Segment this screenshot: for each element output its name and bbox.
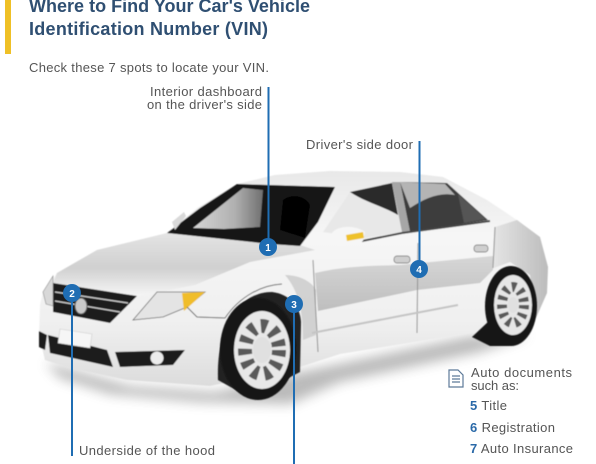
callout 4: driver's side door: [306, 137, 428, 278]
rear window light: [400, 182, 455, 208]
hood: [53, 233, 315, 296]
side intake: [39, 331, 47, 350]
callout 1: interior dashboard: 1: [265, 243, 271, 254]
intro text: Check these 7 spots to locate your VIN.: [29, 60, 269, 75]
bumper crease: [187, 284, 282, 318]
headlight amber: [182, 292, 205, 311]
lower intake: [48, 335, 113, 367]
far side mirror: [172, 212, 186, 230]
body silhouette: [39, 171, 548, 386]
window pillar: [392, 182, 410, 232]
front window dark reflection: [350, 183, 398, 215]
side mirror: [331, 227, 365, 245]
fender shading: [285, 275, 316, 340]
ground shadow: [45, 335, 530, 404]
title: [29, 0, 310, 39]
car illustration: [39, 171, 548, 404]
document item 7: 7 Auto Insurance: [470, 441, 573, 456]
accent bar: [5, 0, 11, 54]
callout 4: driver's side door: Driver's side door: [306, 137, 414, 152]
rear quarter glass: [458, 194, 486, 223]
door seams: [312, 227, 495, 352]
car body: [39, 171, 548, 386]
far headlight: [43, 276, 53, 306]
auto documents list: Auto documents: [471, 365, 572, 380]
document item 5: 5 Title: [470, 398, 507, 413]
document item 6: 6 Registration: [470, 420, 555, 435]
front wheel arch shade: [218, 292, 301, 398]
badge: [75, 298, 87, 314]
auto documents list: [470, 365, 573, 456]
callout 4: driver's side door: 4: [416, 265, 422, 276]
callout 2: underside of the hood: [63, 284, 215, 458]
grille chrome bars: [55, 292, 128, 312]
callout 3: line to bottom: [285, 295, 303, 464]
headlight: [133, 292, 205, 320]
callout 1: interior dashboard: on the driver's side: [147, 97, 262, 112]
auto documents list: such as:: [471, 378, 519, 393]
front wheel: [220, 298, 296, 400]
windshield reflection: [193, 188, 263, 229]
title: Identification Number (VIN): [29, 19, 268, 39]
icon: document: [449, 370, 463, 387]
license plate: [58, 329, 92, 348]
mirror indicator: [346, 232, 364, 241]
callout 1: interior dashboard: [147, 84, 277, 256]
fog lamp housing: [115, 350, 185, 367]
grey door band: [315, 256, 493, 311]
fog lamp: [150, 352, 164, 364]
front side window: [323, 182, 402, 238]
callout 2: underside of the hood: 2: [69, 289, 75, 300]
windshield: [167, 184, 335, 246]
rear quarter panel: [494, 220, 548, 318]
grille: [53, 283, 137, 323]
callout 2: underside of the hood: Underside of the hood: [79, 443, 215, 458]
window sill: [362, 221, 490, 241]
callout 1: interior dashboard: Interior dashboard: [150, 84, 262, 99]
callout 3: line to bottom: 3: [291, 300, 297, 311]
door handles: [394, 245, 488, 263]
rear wheel: [472, 266, 537, 346]
rear side window: [400, 182, 488, 232]
driver seat: [280, 196, 310, 238]
